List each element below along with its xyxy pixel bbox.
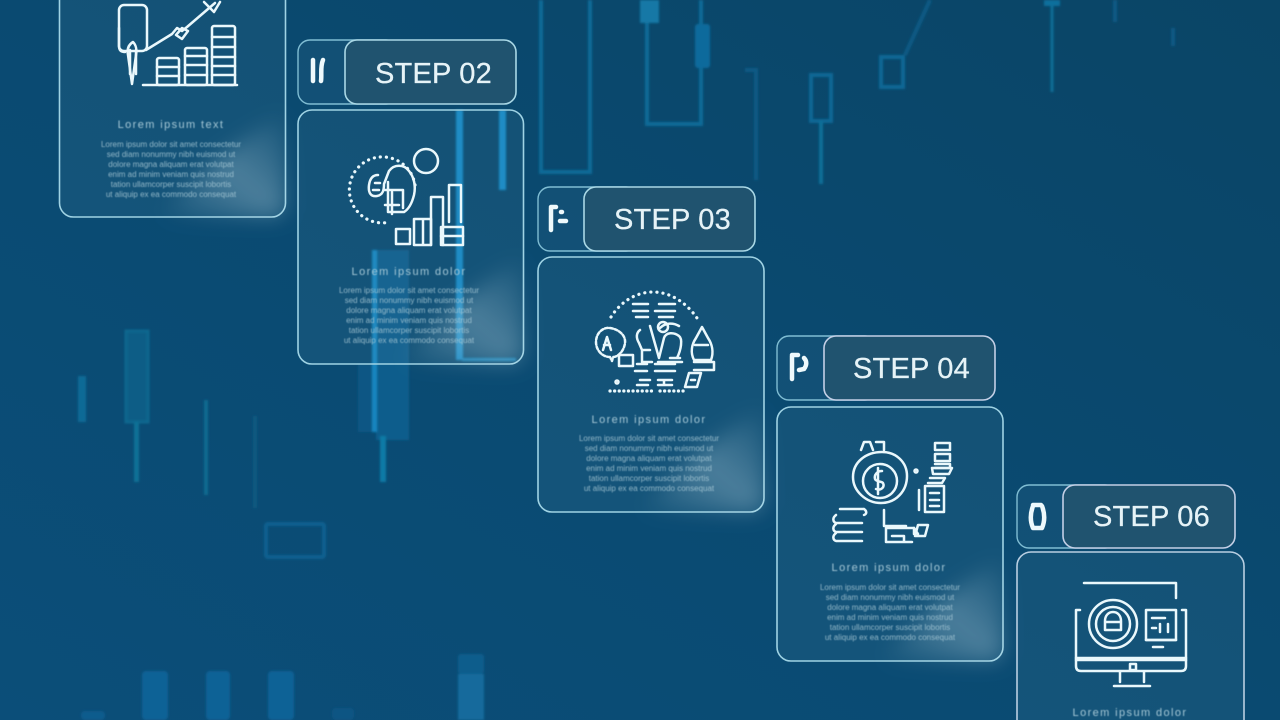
heading: Lorem ipsum dolor	[832, 562, 946, 574]
panel: step 02 tab	[298, 40, 516, 104]
step number glyph	[313, 60, 323, 81]
icon: pie and bars	[349, 149, 463, 245]
body text: Lorem ipsum dolor sit amet consectetur	[579, 434, 719, 443]
step label: STEP 03	[614, 204, 731, 236]
body text: tation ullamcorper suscipit lobortis	[349, 326, 469, 335]
step label: STEP 06	[1093, 501, 1210, 533]
body text: enim ad minim veniam quis nostrud	[346, 316, 472, 325]
body text	[820, 583, 960, 642]
body text	[101, 140, 241, 199]
panel: step 06 tab	[1017, 485, 1235, 548]
step number glyph	[1031, 505, 1044, 528]
body text: sed diam nonummy nibh euismod ut	[585, 444, 714, 453]
heading: Lorem ipsum dolor	[592, 414, 706, 426]
body text: dolore magna aliquam erat volutpat	[346, 306, 472, 315]
icon: monitor with lock	[1076, 583, 1186, 686]
body text: Lorem ipsum dolor sit amet consectetur	[339, 286, 479, 295]
background candlestick chart: lower	[78, 110, 516, 720]
step number glyph	[792, 355, 806, 379]
step label: STEP 04	[853, 353, 970, 385]
icon: idea bulb with speech bubble	[596, 292, 714, 391]
panel: step 06 card	[1017, 552, 1244, 720]
panel: step 02 card	[298, 110, 524, 364]
body text: enim ad minim veniam quis nostrud	[108, 170, 234, 179]
body text: enim ad minim veniam quis nostrud	[586, 464, 712, 473]
body text: dolore magna aliquam erat volutpat	[108, 160, 234, 169]
panel: step 03 card	[538, 257, 764, 512]
body text: ut aliquip ex ea commodo consequat	[825, 633, 956, 642]
body text: dolore magna aliquam erat volutpat	[586, 454, 712, 463]
body text: tation ullamcorper suscipit lobortis	[111, 180, 231, 189]
background candlestick chart: upper	[541, 0, 1173, 184]
panel: step 03 tab	[538, 187, 755, 251]
heading: Lorem ipsum text	[118, 119, 224, 131]
icon: coin and stacks	[833, 442, 952, 542]
body text: sed diam nonummy nibh euismod ut	[345, 296, 474, 305]
body text: sed diam nonummy nibh euismod ut	[107, 150, 236, 159]
body text: tation ullamcorper suscipit lobortis	[589, 474, 709, 483]
body text: tation ullamcorper suscipit lobortis	[830, 623, 950, 632]
panel: step 04 tab	[777, 336, 995, 400]
panel: step 04 card	[777, 407, 1003, 661]
body text: Lorem ipsum dolor sit amet consectetur	[101, 140, 241, 149]
panel: step 01 card	[60, 0, 286, 217]
body text: ut aliquip ex ea commodo consequat	[344, 336, 475, 345]
body text: Lorem ipsum dolor sit amet consectetur	[820, 583, 960, 592]
heading: Lorem ipsum dolor	[1073, 707, 1187, 719]
body text: ut aliquip ex ea commodo consequat	[106, 190, 237, 199]
body text: ut aliquip ex ea commodo consequat	[584, 484, 715, 493]
sheen	[160, 110, 285, 217]
body text: enim ad minim veniam quis nostrud	[827, 613, 953, 622]
step label: STEP 02	[375, 58, 492, 90]
body text	[339, 286, 479, 345]
body text	[579, 434, 719, 493]
step number glyph	[551, 207, 566, 230]
icon: microphone and rising chart	[119, 2, 237, 85]
body text: sed diam nonummy nibh euismod ut	[826, 593, 955, 602]
body text: dolore magna aliquam erat volutpat	[827, 603, 953, 612]
heading: Lorem ipsum dolor	[352, 266, 466, 278]
